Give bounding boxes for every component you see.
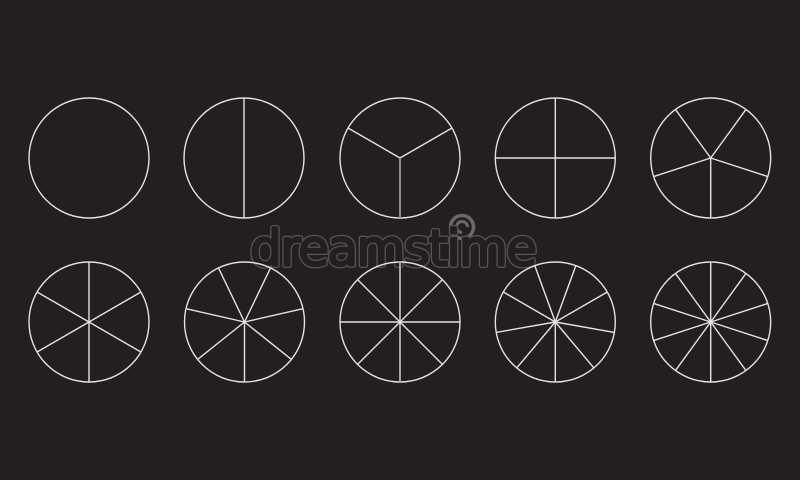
circle: 4 parts xyxy=(495,98,615,218)
watermark: dreamstime xyxy=(250,216,537,278)
circle: 8 parts xyxy=(340,262,460,382)
circle: 5 parts xyxy=(651,98,771,218)
circle: 10 parts xyxy=(651,262,771,382)
circle: 6 parts xyxy=(29,262,149,382)
circle: 7 parts xyxy=(184,262,304,382)
watermark spiral icon xyxy=(450,216,474,238)
circle: 9 parts xyxy=(495,262,615,382)
watermark wordmark: dreamstime xyxy=(250,220,537,278)
circle: 1 whole xyxy=(29,98,149,218)
circle: 2 parts xyxy=(184,98,304,218)
watermark wordmark: dreamstime xyxy=(250,220,537,278)
circle: 3 parts xyxy=(340,98,460,218)
